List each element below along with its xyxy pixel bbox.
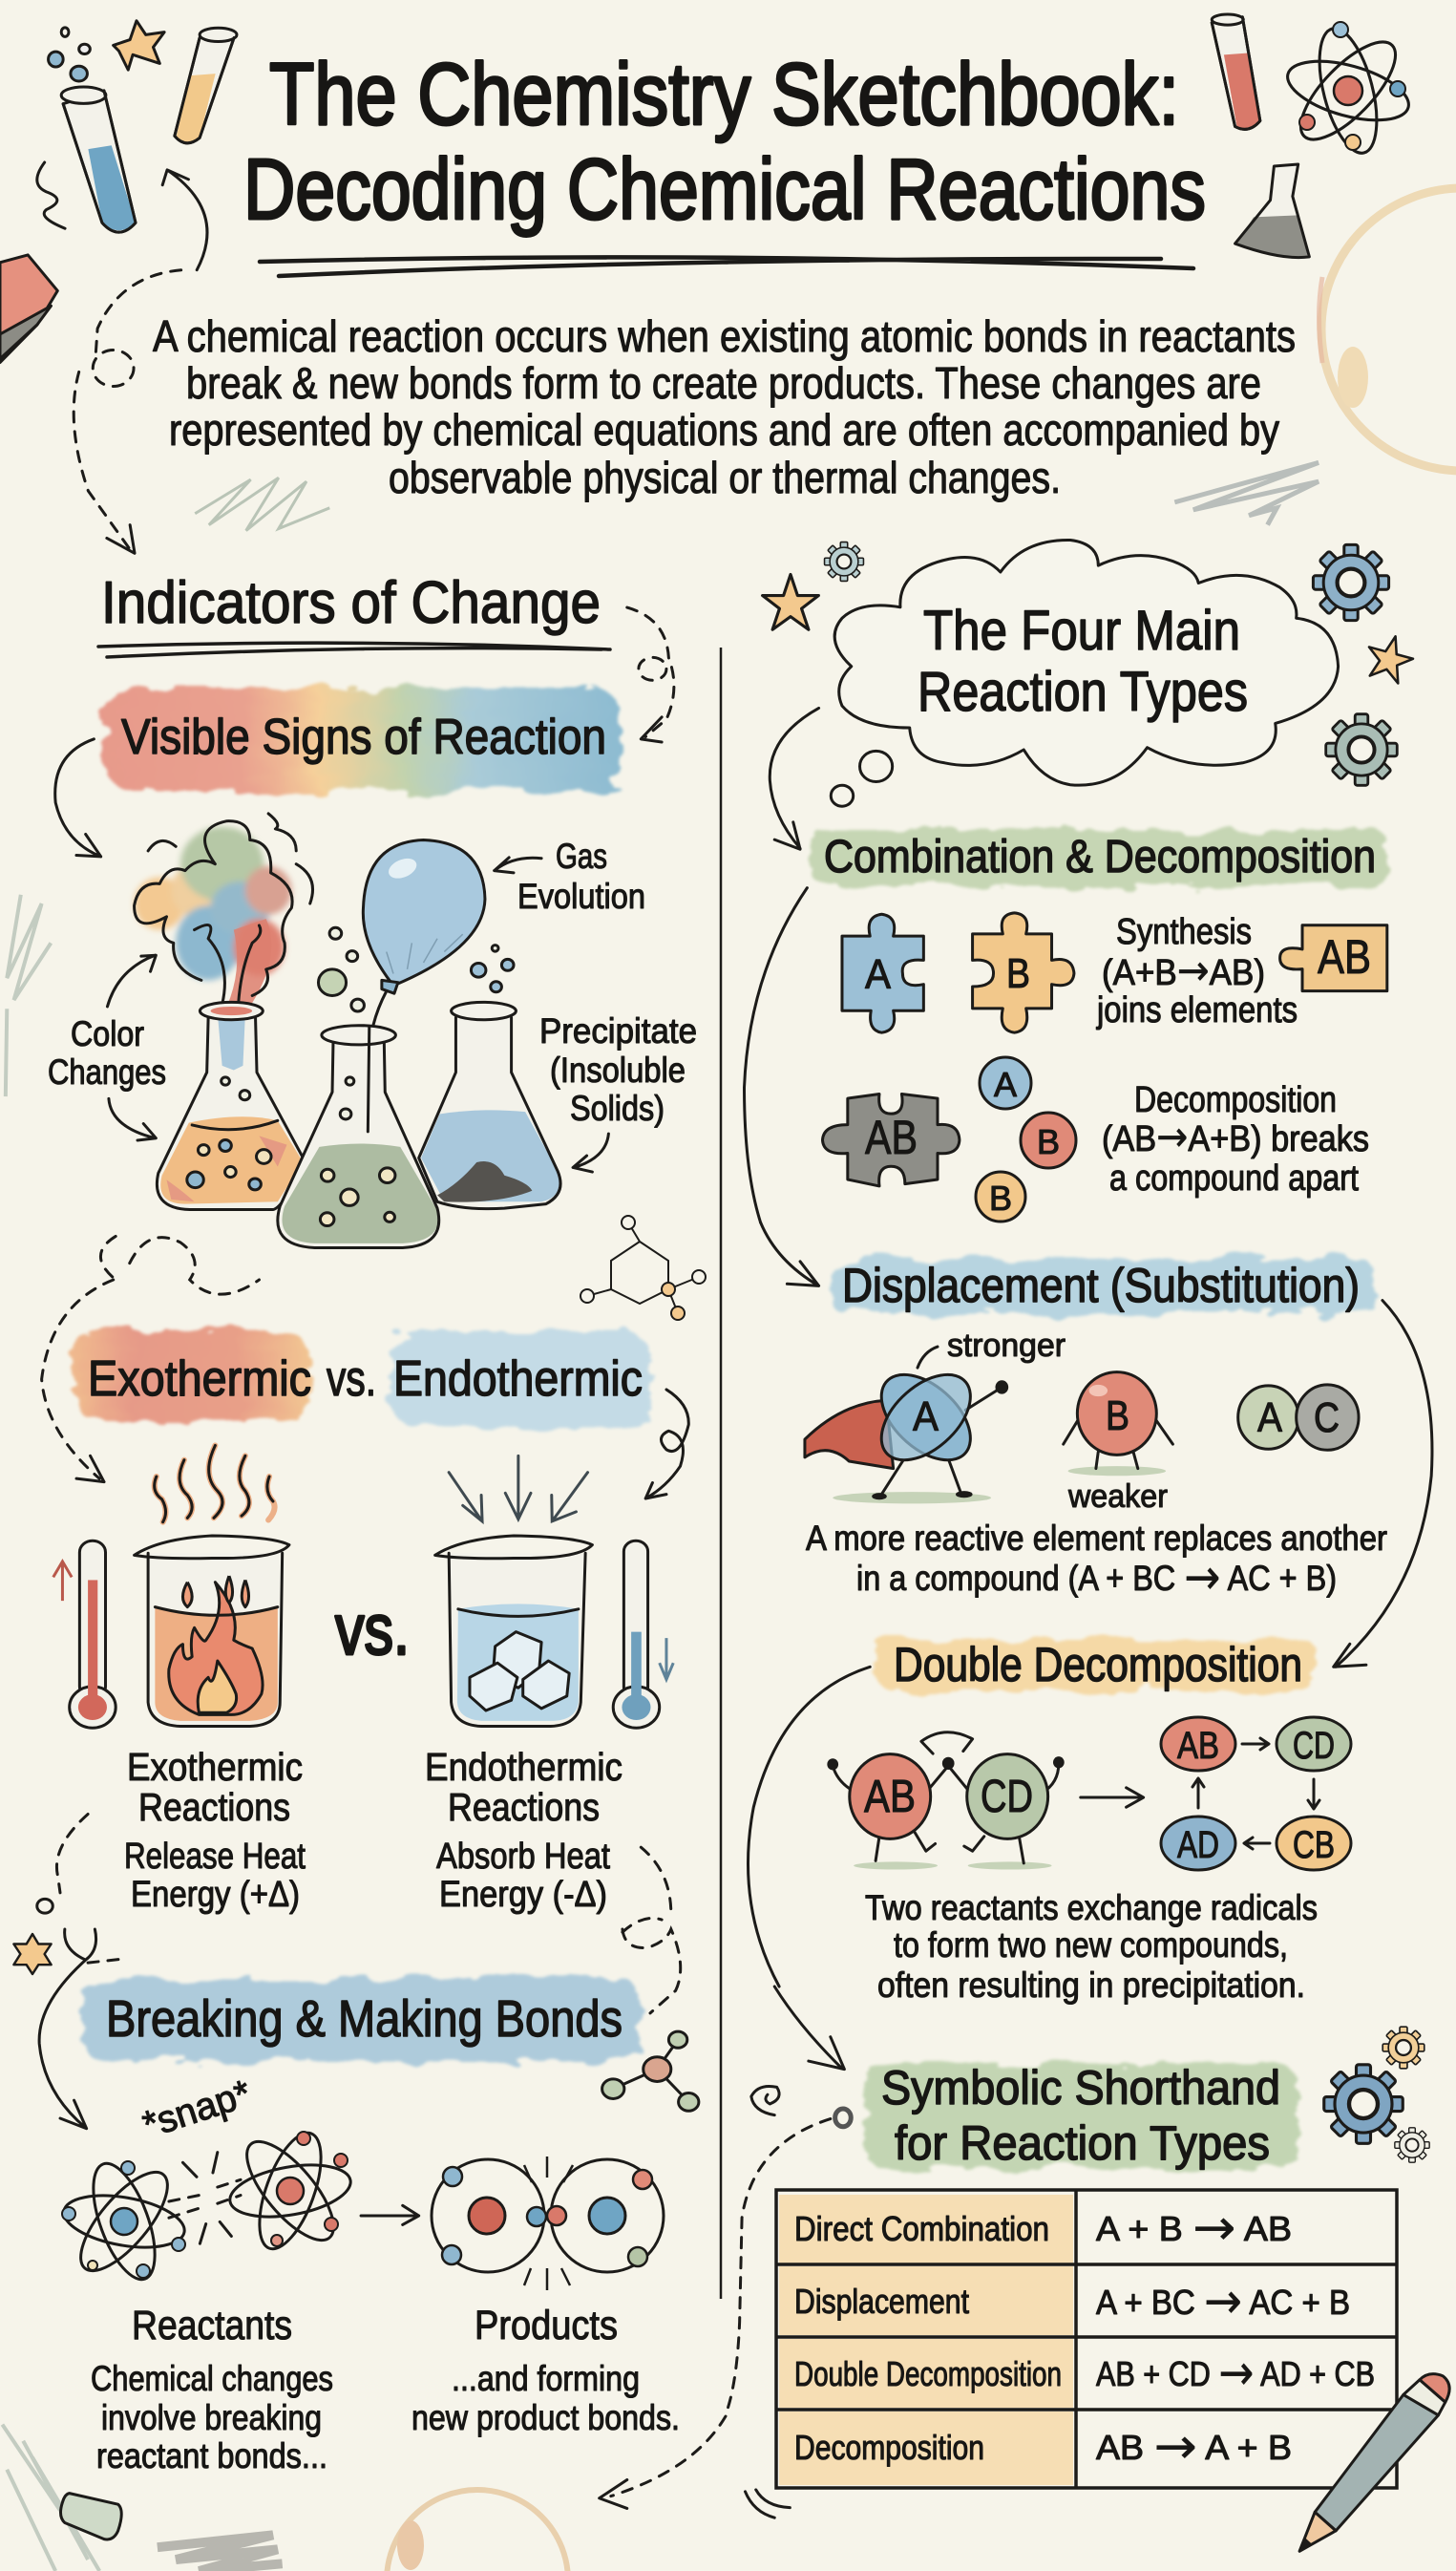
icon: separated circles: B: [1037, 1122, 1060, 1161]
text: displacement description: AC + B): [1220, 1559, 1337, 1598]
text: double decomposition description: often resulting in precipitation.: [877, 1965, 1305, 2005]
icon: atom: [1271, 9, 1425, 173]
wash: combination: [813, 829, 1386, 886]
text: double decomposition description: to form two new compounds,: [894, 1925, 1288, 1965]
arrow: combination to displacement: [745, 888, 807, 1222]
heading: indicators of change: Indicators of Change: [101, 570, 601, 636]
text: exothermic caption: [124, 1745, 306, 1915]
text: displacement description: A more reactive element replaces another: [806, 1519, 1387, 1558]
table row: double decomposition: →: [1218, 2345, 1254, 2402]
decoration: scribble left: [195, 478, 329, 531]
icon: blue test tube: [61, 87, 136, 232]
arrow: dashed down to indicators: [74, 270, 181, 553]
icon: pencil: [1299, 2374, 1449, 2551]
labels: flask indicators: Solids): [570, 1089, 665, 1128]
title: The Chemistry Sketchbook:: [269, 46, 1179, 143]
decoration: pencil scribble left: [6, 895, 51, 1096]
column divider: [721, 648, 722, 2299]
table row: direct combination: Direct Combination: [794, 2209, 1049, 2248]
balloon: [363, 839, 485, 1132]
icon: six-point star: [13, 1934, 52, 1974]
arrows: flask labels: [107, 858, 608, 1172]
icon: gears: [1324, 2027, 1429, 2162]
icon: molecule: [580, 1216, 706, 1320]
icon: hot thermometer: [53, 1540, 116, 1728]
text: exothermic caption: Reactions: [138, 1785, 290, 1829]
right flask: [419, 1002, 560, 1209]
table row: displacement: [794, 2273, 1350, 2330]
text: reactants caption: involve breaking: [101, 2398, 322, 2437]
icon: cold thermometer: [613, 1540, 673, 1728]
arrow: double decomposition to shorthand lower: [774, 1987, 844, 2070]
heading: the four main reaction types: [918, 600, 1248, 723]
text: double decomposition description: [865, 1888, 1318, 2005]
icon: bubbles: [49, 28, 90, 81]
icon: cold arrows: [449, 1455, 588, 1521]
text: exothermic caption: Energy (+Δ): [131, 1875, 300, 1915]
center flask: [278, 1026, 439, 1248]
text: products caption: ...and forming: [452, 2359, 640, 2398]
table shading: [779, 2195, 1073, 2485]
diagram: exchange cycle: AB: [1177, 1725, 1219, 1767]
table row: decomposition: →: [1153, 2418, 1197, 2475]
icon: reactant atom red: [219, 2116, 362, 2265]
text: products caption: new product bonds.: [411, 2398, 680, 2437]
icon: AC compound: A: [1257, 1394, 1283, 1441]
table row: displacement: →: [1204, 2273, 1242, 2330]
text: reactants caption: [91, 2303, 333, 2475]
heading: symbolic shorthand: [881, 2061, 1280, 2170]
text: displacement description: →: [1184, 1549, 1220, 1606]
arrow: dashed loop to exothermic beaker: [42, 1236, 259, 1482]
table row: displacement: A + BC: [1096, 2283, 1204, 2322]
icon: heat waves: [155, 1445, 275, 1522]
labels: flask indicators: [48, 837, 697, 1128]
text: displacement description: [806, 1519, 1387, 1606]
heading: symbolic shorthand: for Reaction Types: [895, 2116, 1270, 2170]
icon: puzzle B: [973, 913, 1074, 1032]
table row: decomposition: AB: [1096, 2428, 1142, 2467]
heading: exothermic vs endothermic: Endothermic: [393, 1351, 643, 1407]
title: Decoding Chemical Reactions: [243, 142, 1206, 238]
labels: flask indicators: Precipitate: [539, 1011, 697, 1051]
icon: hero atom A: A: [913, 1393, 939, 1440]
labels: flask indicators: Changes: [48, 1052, 166, 1092]
table: reaction shorthand: [776, 2190, 1397, 2488]
decoration: bottom left eraser and scribbles: [2, 2425, 283, 2571]
text: synthesis: [1096, 912, 1298, 1031]
icon: eraser: [0, 255, 57, 363]
text: endothermic caption: Energy (-Δ): [439, 1875, 607, 1915]
text: stronger: stronger: [947, 1328, 1066, 1364]
arrow: cloud to combination: [770, 708, 819, 849]
heading: double decomposition: Double Decomposition: [894, 1638, 1302, 1691]
icon: puzzle A: A: [865, 951, 892, 998]
text: weaker: weaker: [1067, 1478, 1168, 1515]
icon: gears and stars around cloud: [763, 542, 1418, 785]
diagram: exchange cycle: [1161, 1717, 1351, 1870]
panel: four main reaction types: [728, 540, 1449, 2551]
icon: puzzle A: [842, 914, 923, 1032]
icon: AB and CD characters: CD: [981, 1772, 1033, 1822]
text: double decomposition description: Two reactants exchange radicals: [865, 1888, 1318, 1927]
text: endothermic caption: Endothermic: [425, 1745, 622, 1789]
text: exothermic caption: Exothermic: [127, 1745, 303, 1789]
text: endothermic caption: Absorb Heat: [436, 1837, 610, 1877]
table row: decomposition: [794, 2418, 1292, 2475]
labels: flask indicators: Color: [71, 1014, 144, 1053]
decoration: dashed curls: [37, 1814, 671, 1932]
heading: visible signs of reaction: Visible Signs of Reaction: [121, 710, 606, 765]
heading: combination and decomposition: Combination & Decomposition: [824, 832, 1376, 882]
icon: separated circles: B: [989, 1179, 1012, 1218]
table row: displacement: AC + B: [1242, 2283, 1350, 2322]
intro text: A chemical reaction occurs when existing atomic bonds in reactants: [153, 311, 1296, 361]
icon: exothermic beaker: [135, 1536, 289, 1727]
text: decomposition: [1102, 1080, 1369, 1199]
icon: gray puzzle AB: AB: [865, 1111, 918, 1164]
header: [0, 9, 1425, 553]
text: reactants caption: Chemical changes: [91, 2359, 333, 2398]
smoke: [135, 814, 313, 1007]
wash: symbolic shorthand: [864, 2063, 1298, 2170]
decoration: coffee ring top right: [1319, 188, 1456, 471]
title: [243, 46, 1206, 238]
table row: direct combination: [794, 2199, 1292, 2257]
illustration: three flasks: [135, 814, 560, 1248]
arrow: to flasks: [55, 739, 101, 857]
left flask: [157, 1002, 306, 1210]
icon: separated circles: A: [994, 1065, 1017, 1104]
wash: displacement: [833, 1259, 1373, 1314]
table row: double decomposition: [794, 2345, 1375, 2402]
icon: separated circles: [976, 1057, 1076, 1222]
icon: flask: [1235, 164, 1309, 258]
diagram: exchange cycle: CD: [1293, 1725, 1335, 1767]
icon: weak B character: [1064, 1372, 1172, 1476]
arrow: to cycle: [1081, 1788, 1144, 1807]
arrow: to reactants: [39, 1929, 125, 2129]
arrow: displacement to double decomposition: [1334, 1301, 1432, 1667]
title underline: [260, 257, 1193, 276]
heading: the four main reaction types: The Four Main: [923, 600, 1240, 662]
text: synthesis: Synthesis: [1116, 912, 1252, 952]
table row: decomposition: A + B: [1197, 2428, 1292, 2467]
icon: puzzle B: B: [1006, 950, 1030, 997]
text: endothermic caption: [425, 1745, 622, 1915]
icon: product molecule: [432, 2157, 664, 2290]
text: decomposition: Decomposition: [1134, 1080, 1337, 1120]
icon: small molecule: [602, 2031, 699, 2111]
icon: squiggle: [37, 162, 65, 228]
icon: AB and CD characters: [827, 1732, 1065, 1870]
decoration: scribble right: [1174, 462, 1319, 525]
cloud heading shape: [831, 540, 1339, 806]
wash: visible signs: [105, 688, 621, 791]
table row: direct combination: →: [1192, 2199, 1236, 2257]
arrow: dashed right: [622, 1929, 681, 2013]
heading: exothermic vs endothermic: [88, 1351, 643, 1407]
intro text: break & new bonds form to create products. These changes are: [186, 358, 1261, 408]
heading: the four main reaction types: Reaction Types: [918, 661, 1248, 723]
labels: flask indicators: Gas: [556, 837, 607, 876]
heading: symbolic shorthand: Symbolic Shorthand: [881, 2061, 1280, 2114]
text: snap: *snap*: [137, 2072, 256, 2147]
text: synthesis: joins elements: [1096, 990, 1298, 1031]
intro text: observable physical or thermal changes.: [389, 453, 1061, 502]
icon: AC compound: C: [1314, 1394, 1340, 1441]
labels: flask indicators: Evolution: [517, 877, 645, 916]
panel: indicators of change: [2, 570, 726, 2571]
icon: yellow test tube: [175, 28, 237, 143]
wash: breaking bonds: [82, 1977, 640, 2061]
arrow: dashed to table: [600, 2416, 726, 2508]
text: decomposition: a compound apart: [1109, 1158, 1359, 1199]
text: vs: vs.: [335, 1589, 410, 1669]
table row: double decomposition: AD + CB: [1254, 2354, 1375, 2393]
icon: puzzle AB: [1280, 925, 1387, 991]
icon: puzzle AB: AB: [1318, 930, 1371, 984]
arrow: dashed to visible signs: [627, 607, 674, 742]
table row: decomposition: Decomposition: [794, 2428, 984, 2467]
heading: breaking and making bonds: Breaking & Making Bonds: [106, 1990, 622, 2048]
icon: gray puzzle AB: [822, 1094, 960, 1186]
intro text: represented by chemical equations and are often accompanied by: [169, 405, 1279, 455]
arrow: reactants to products: [361, 2205, 419, 2224]
wash: exothermic: [74, 1329, 309, 1423]
table row: displacement: Displacement: [794, 2282, 969, 2321]
arrow: combination to displacement lower: [761, 1222, 819, 1286]
text: products caption: Products: [475, 2303, 618, 2348]
labels: flask indicators: (Insoluble: [550, 1051, 686, 1090]
text: products caption: [411, 2303, 680, 2437]
text: reactants caption: reactant bonds...: [96, 2436, 327, 2475]
decoration: bottom coffee ring: [387, 2490, 568, 2571]
heading underline: [98, 643, 610, 657]
text: synthesis: (A+B→AB): [1102, 946, 1265, 995]
icon: red test tube: [1212, 14, 1260, 129]
icon: reactant atom blue: [53, 2147, 196, 2296]
text: reactants caption: Reactants: [132, 2303, 292, 2348]
icon: AC compound: [1238, 1385, 1359, 1450]
icon: endothermic beaker: [435, 1536, 592, 1727]
text: decomposition: (AB→A+B) breaks: [1102, 1113, 1369, 1161]
arrow: loop to endothermic beaker: [645, 1390, 688, 1498]
text: displacement description: in a compound (A + BC: [856, 1559, 1221, 1598]
intro text: [153, 311, 1296, 502]
wash: double decomposition: [876, 1639, 1318, 1690]
text: exothermic caption: Release Heat: [124, 1837, 306, 1877]
icon: hero atom A: [805, 1347, 1008, 1503]
icon: broken bond dashes: [169, 2153, 241, 2243]
floating bubbles: [222, 927, 514, 1119]
diagram: exchange cycle: CB: [1293, 1824, 1335, 1866]
heading: exothermic vs endothermic: vs.: [327, 1351, 376, 1407]
arrow: up to test tube: [162, 170, 207, 270]
text: endothermic caption: Reactions: [448, 1785, 600, 1829]
heading: displacement: Displacement (Substitution): [842, 1259, 1360, 1312]
table row: double decomposition: AB + CD: [1096, 2354, 1231, 2393]
icon: weak B character: B: [1106, 1392, 1129, 1439]
decoration: spiral, dashed arrow and swoosh: [728, 2087, 851, 2518]
table lines: [776, 2190, 1397, 2488]
icon: AB and CD characters: AB: [864, 1772, 916, 1822]
wash: endothermic: [390, 1331, 651, 1427]
table row: direct combination: AB: [1236, 2209, 1292, 2248]
icon: star top left: [114, 21, 164, 70]
diagram: exchange cycle: AD: [1177, 1824, 1219, 1866]
arrow: double decomposition to shorthand: [748, 1667, 870, 1987]
heading: exothermic vs endothermic: Exothermic: [88, 1351, 311, 1407]
table row: direct combination: A + B: [1096, 2209, 1179, 2248]
table row: double decomposition: Double Decomposition: [794, 2354, 1062, 2393]
